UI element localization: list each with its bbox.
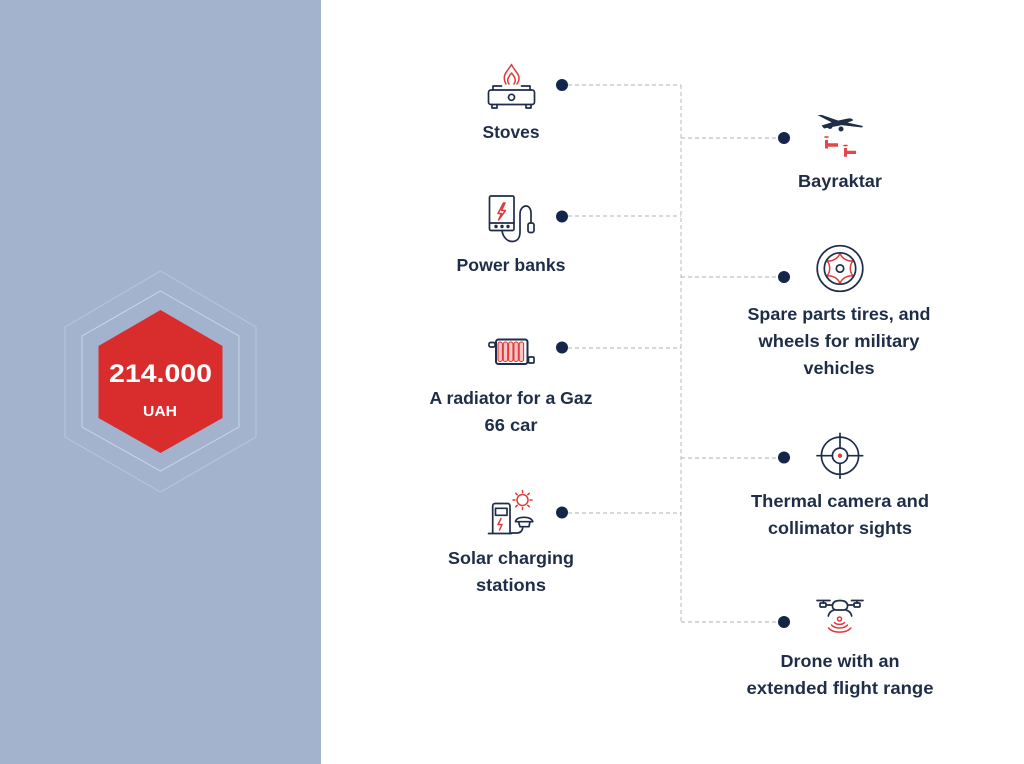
item: thermal camera: collimator sights [768, 518, 912, 538]
item: solar charging stations: stations [476, 575, 546, 595]
dashed connector lines [568, 85, 780, 622]
item: drone [746, 600, 934, 698]
connector dot [778, 452, 790, 464]
label: Drone with an [780, 651, 900, 671]
icon: drone with signal [817, 600, 863, 632]
item: radiator: 66 car [484, 415, 538, 435]
currency label: UAH [143, 403, 177, 420]
icon: gas stove [488, 64, 534, 108]
connector dot [778, 616, 790, 628]
icon: wheel [817, 246, 863, 291]
item: spare parts [748, 246, 930, 378]
label: Bayraktar [798, 171, 882, 191]
connector dot [556, 506, 568, 518]
connector dot [556, 210, 568, 222]
connector dot [556, 342, 568, 354]
icon: solar charging station [488, 490, 533, 534]
item: stoves [482, 64, 568, 142]
icon: power bank [490, 196, 534, 242]
icon: radiator [489, 340, 534, 364]
panel: left total [0, 0, 321, 764]
connector dot [556, 79, 568, 91]
icon: crosshair [817, 433, 863, 478]
total amount: 214.000 [109, 360, 212, 388]
item: thermal camera [751, 433, 929, 538]
icon: bayraktar drone with munitions [818, 115, 863, 157]
item: solar charging stations [448, 490, 574, 595]
item: radiator [430, 340, 593, 435]
outer hexagon outline [65, 271, 256, 492]
label: Stoves [482, 122, 540, 142]
connector dot [778, 132, 790, 144]
label: Power banks [456, 255, 566, 275]
connector dot [778, 271, 790, 283]
label: A radiator for a Gaz [430, 388, 593, 408]
label: Thermal camera and [751, 491, 929, 511]
middle hexagon outline [82, 291, 239, 471]
red hexagon [98, 310, 222, 453]
label: Spare parts tires, and [748, 304, 930, 324]
label: Solar charging [448, 548, 574, 568]
item: drone: extended flight range [746, 678, 934, 698]
item: spare parts: vehicles [804, 358, 875, 378]
item: bayraktar [778, 115, 882, 191]
item: power banks [456, 196, 568, 275]
item: spare parts: wheels for military [757, 331, 920, 351]
